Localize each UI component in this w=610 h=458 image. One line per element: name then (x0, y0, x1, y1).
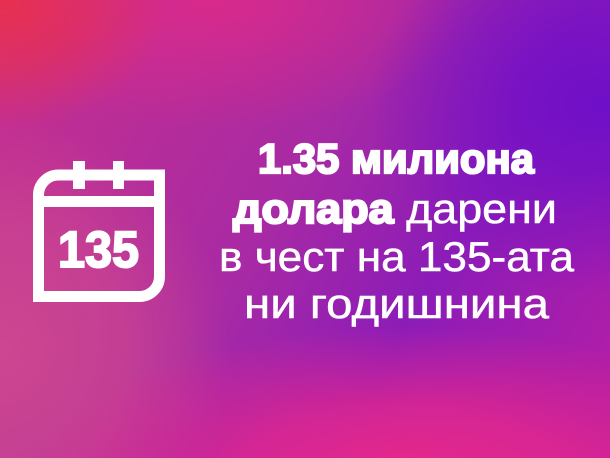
icon: calendar with 135: 135 (58, 221, 139, 278)
headline line 1: 1.35 милиона (258, 135, 535, 182)
headline text (219, 135, 575, 327)
icon: calendar with 135 (38, 161, 160, 296)
headline line 2: долара дарени (233, 185, 557, 232)
headline line 4: ни годишнина (244, 280, 550, 327)
headline line 3: в чест на 135-ата (219, 233, 575, 280)
